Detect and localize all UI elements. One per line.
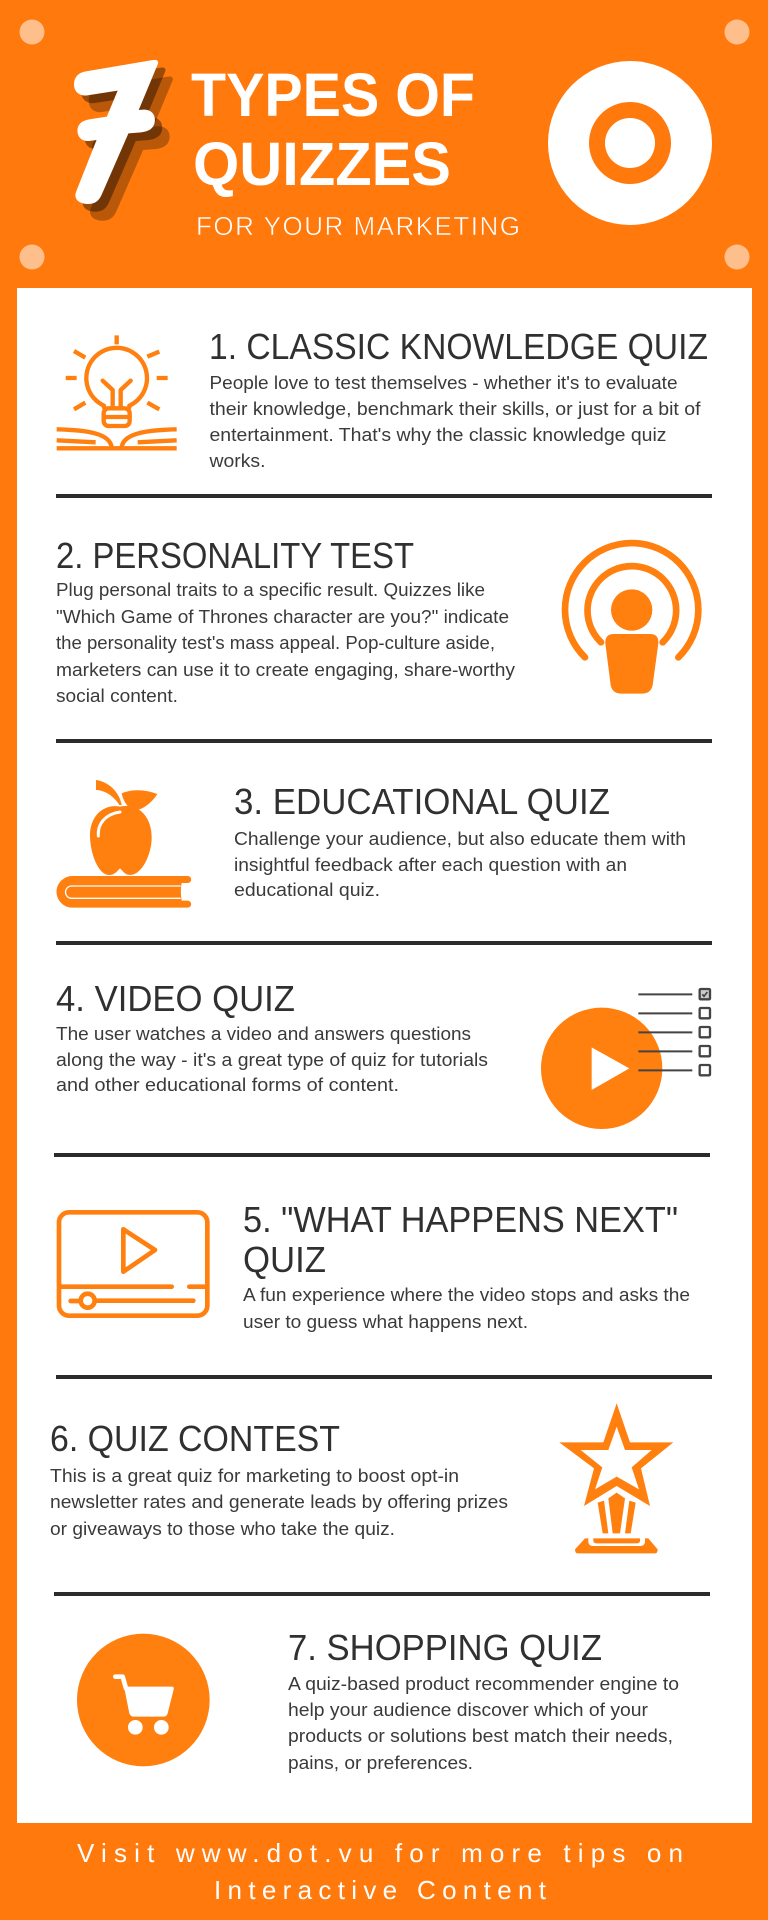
text: section 6 body: or giveaways to those who take the quiz. [50, 1519, 395, 1539]
heading 6: 6. QUIZ CONTEST [50, 1418, 340, 1459]
text: section 4 body: along the way - it's a great type of quiz for tutorials [56, 1050, 488, 1070]
main white panel [17, 288, 752, 1823]
section 2: personality test [56, 535, 698, 706]
heading 3: 3. EDUCATIONAL QUIZ [234, 781, 610, 822]
text: section 2 body [56, 580, 515, 706]
big numeral seven with shadows [74, 60, 173, 221]
section 4: video quiz [56, 978, 710, 1129]
icon: video player [59, 1212, 207, 1316]
text: section 4 body [56, 1024, 488, 1095]
icon: star trophy [559, 1403, 673, 1553]
text: section 3 body: insightful feedback after each question with an [234, 855, 627, 875]
footer call to action [77, 1838, 683, 1905]
text: section 6 body [50, 1466, 508, 1539]
title: QUIZZES [193, 130, 451, 198]
divider [54, 1592, 710, 1596]
divider [56, 1375, 712, 1379]
section 7: shopping quiz [77, 1627, 679, 1773]
text: section 2 body: "Which Game of Thrones character are you?" indicate [56, 607, 509, 627]
text: section 2 body: Plug personal traits to a specific result. Quizzes like [56, 580, 485, 600]
divider [56, 494, 712, 498]
text: section 5 body: user to guess what happens next. [243, 1312, 528, 1332]
text: section 7 body [288, 1674, 679, 1773]
heading 2: 2. PERSONALITY TEST [56, 535, 414, 576]
decorative header dots [20, 20, 750, 270]
text: section 1 body [208, 373, 702, 471]
text: section 3 body: educational quiz. [234, 880, 380, 900]
section 6: quiz contest [50, 1403, 673, 1553]
text: section 6 body: newsletter rates and generate leads by offering prizes [50, 1492, 508, 1512]
section 5: what happens next quiz [59, 1199, 690, 1332]
title [191, 61, 475, 198]
title: TYPES OF [191, 61, 475, 129]
divider [54, 1153, 710, 1157]
divider [56, 739, 712, 743]
text: section 1 body: entertainment. That's why the classic knowledge quiz [210, 425, 666, 445]
text: section 4 body: The user watches a video and answers questions [56, 1024, 471, 1044]
text: section 5 body [243, 1285, 690, 1332]
text: section 7 body: products or solutions best match their needs, [288, 1726, 673, 1746]
heading 5: QUIZ [243, 1239, 326, 1280]
heading 5: 5. "WHAT HAPPENS NEXT" [243, 1199, 678, 1240]
icon: person broadcasting [565, 543, 698, 694]
text: section 7 body: pains, or preferences. [288, 1753, 473, 1773]
text: section 5 body: A fun experience where the video stops and asks the [243, 1285, 690, 1305]
text: section 7 body: A quiz-based product recommender engine to [288, 1674, 679, 1694]
text: section 2 body: marketers can use it to create engaging, share-worthy [56, 660, 515, 680]
icon: lightbulb over open book [57, 335, 177, 448]
footer call to action: Interactive Content [214, 1875, 547, 1905]
text: section 7 body: help your audience discover which of your [288, 1700, 648, 1720]
text: section 6 body: This is a great quiz for marketing to boost opt-in [50, 1466, 459, 1486]
heading 1: 1. CLASSIC KNOWLEDGE QUIZ [209, 326, 708, 367]
text: section 2 body: the personality test's mass appeal. Pop-culture aside, [56, 633, 495, 653]
icon: target [548, 61, 712, 225]
heading 7: 7. SHOPPING QUIZ [288, 1627, 602, 1668]
heading 5 [243, 1199, 678, 1280]
text: section 1 body: works. [208, 451, 266, 471]
text: section 1 body: People love to test themselves - whether it's to evaluate [210, 373, 678, 393]
icon: apple on book [56, 780, 191, 908]
text: section 4 body: and other educational forms of content. [56, 1075, 399, 1095]
divider [56, 941, 712, 945]
footer call to action: Visit www.dot.vu for more tips on [77, 1838, 683, 1868]
section 1: classic knowledge quiz [57, 326, 708, 471]
text: section 1 body: their knowledge, benchmark their skills, or just for a bit of [210, 399, 702, 419]
text: section 3 body [234, 829, 686, 900]
heading 4: 4. VIDEO QUIZ [56, 978, 295, 1019]
text: section 2 body: social content. [56, 686, 178, 706]
icon: play button with checklist [541, 989, 710, 1129]
icon: shopping cart in circle [77, 1634, 210, 1766]
section 3: educational quiz [56, 780, 686, 908]
text: section 3 body: Challenge your audience, but also educate them with [234, 829, 686, 849]
subtitle: FOR YOUR MARKETING [196, 211, 520, 241]
